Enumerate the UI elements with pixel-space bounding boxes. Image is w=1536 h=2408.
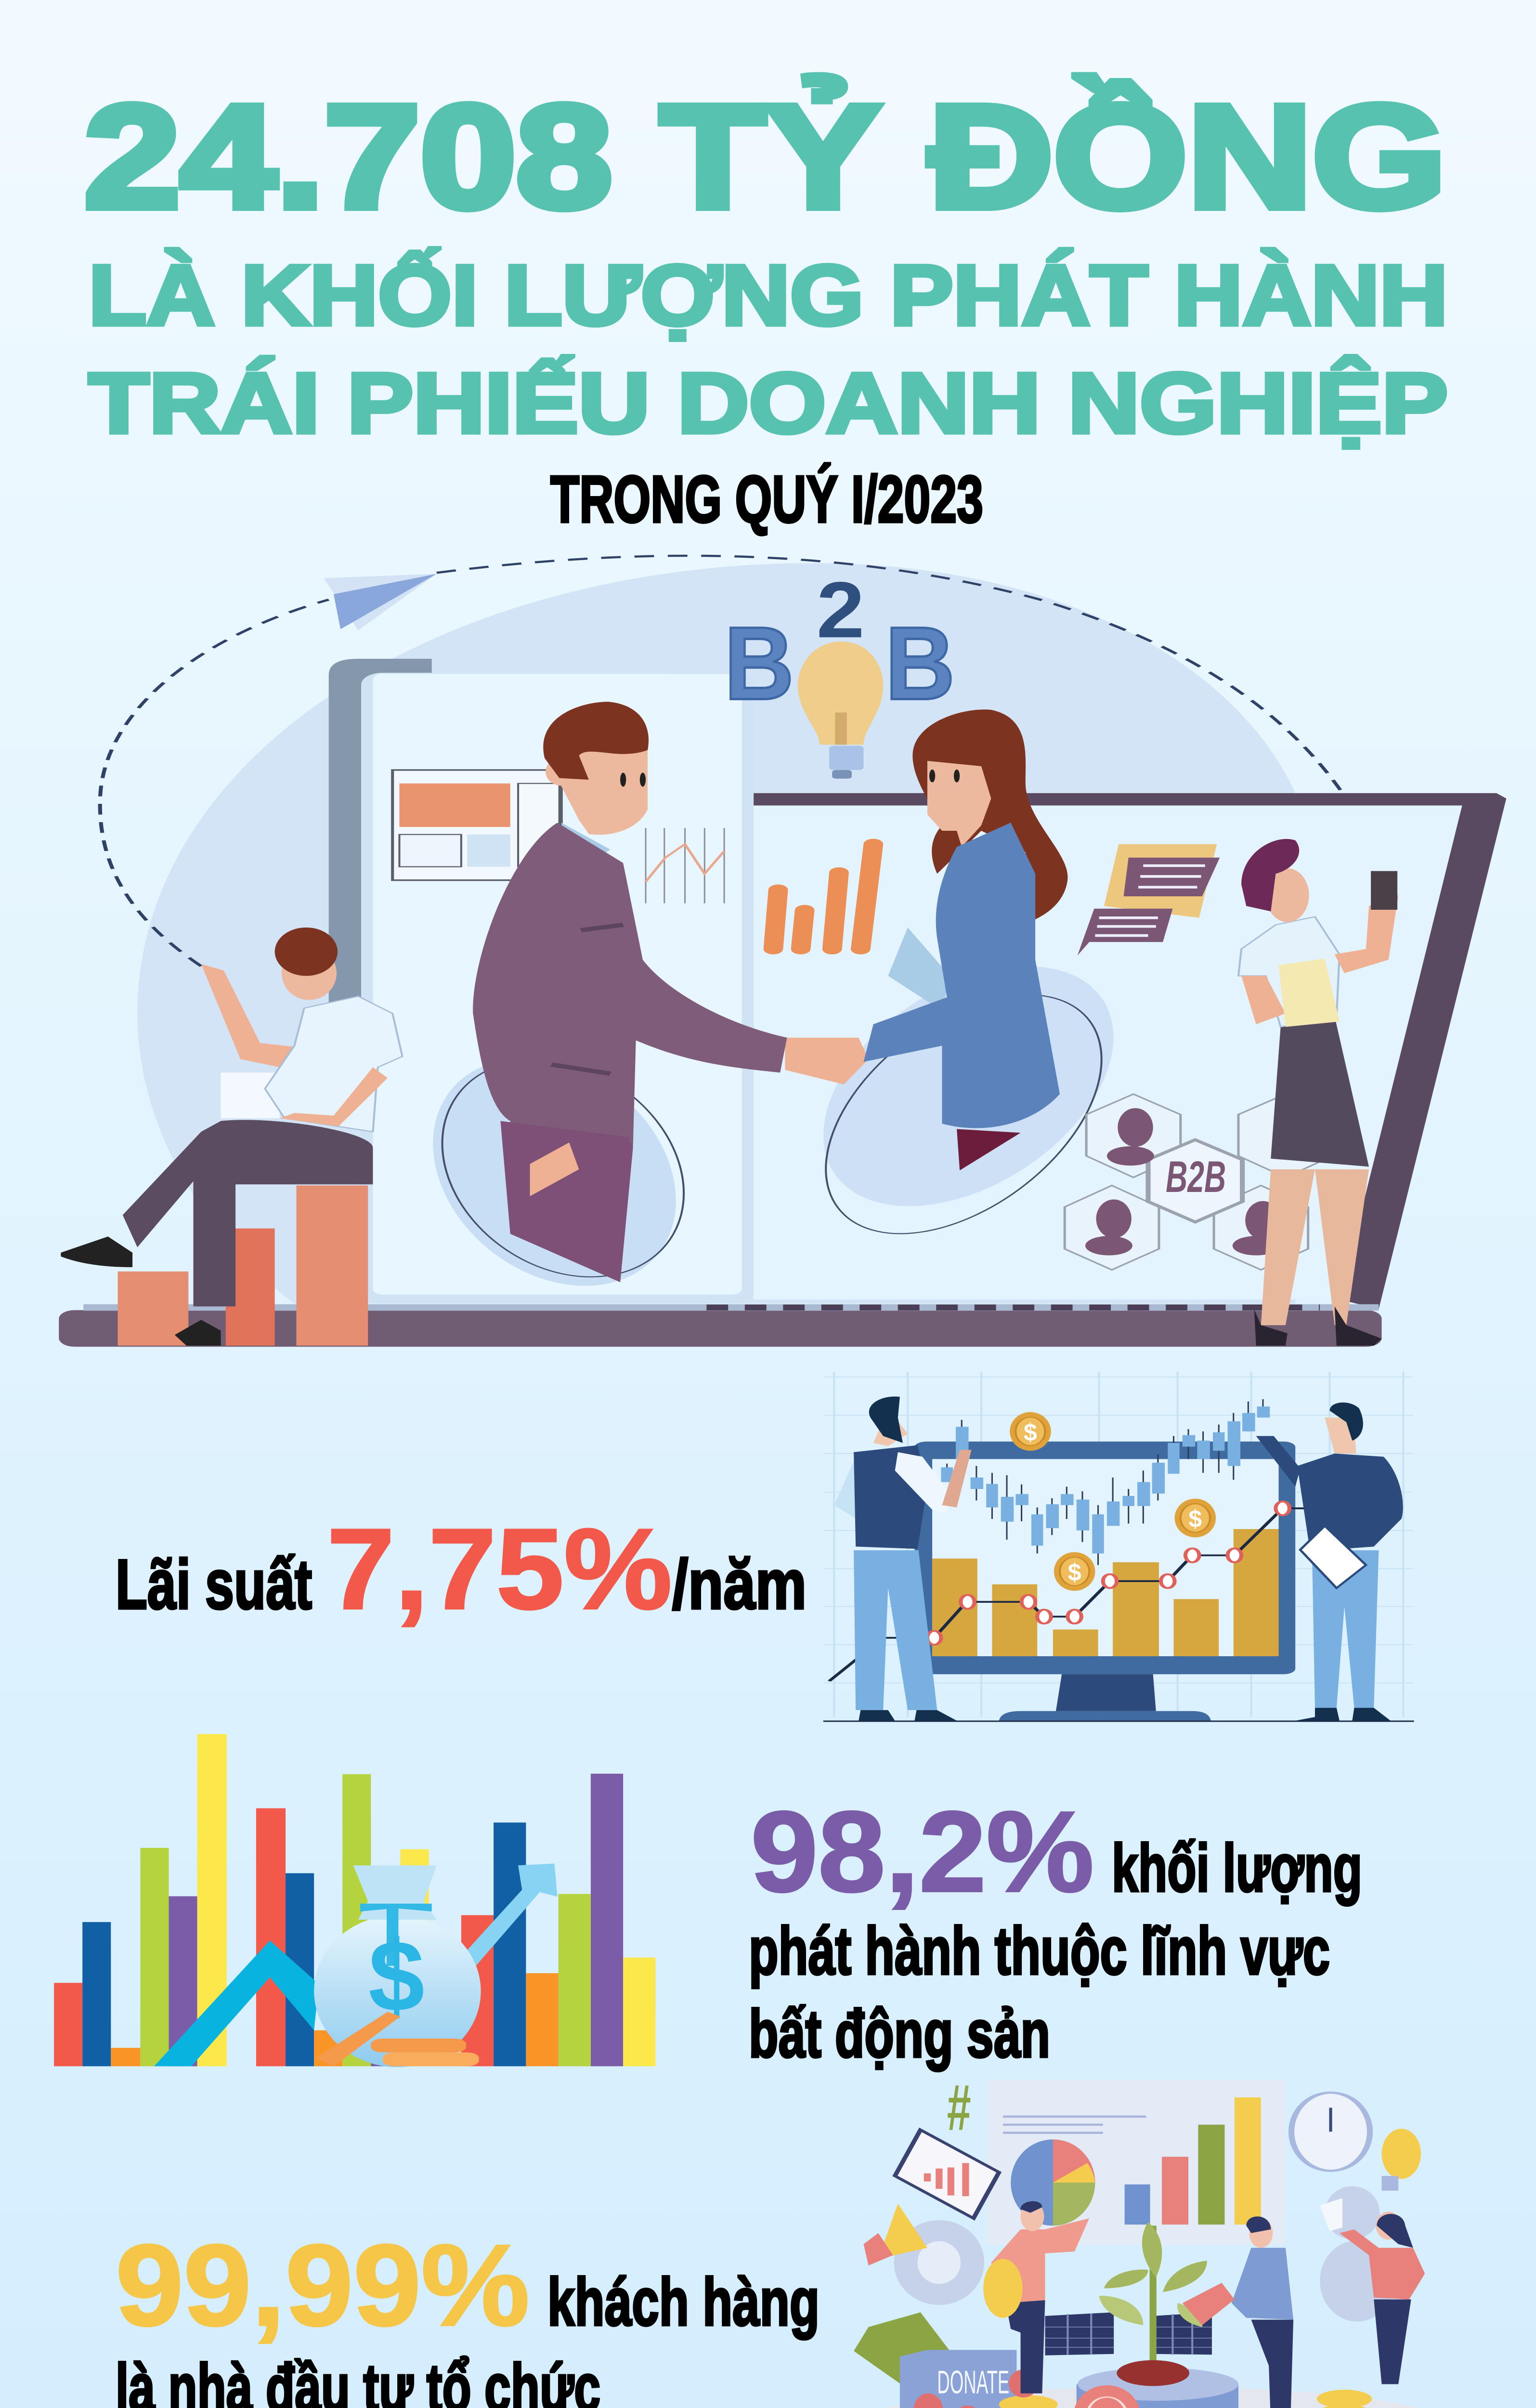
banknote [854, 2312, 950, 2384]
text line 1: khách hàng [547, 2264, 820, 2340]
ground [854, 2387, 1452, 2408]
title line 3: TRÁI PHIẾU DOANH NGHIỆP [89, 355, 1448, 451]
B2B letters: B [724, 605, 794, 721]
hash icon: # [947, 2071, 971, 2144]
label: Lãi suất [116, 1545, 312, 1623]
bulb [1382, 2129, 1421, 2191]
title block [84, 74, 1448, 537]
stat: real estate share [749, 1788, 1362, 2071]
value: 7,75% [327, 1505, 672, 1633]
tablet [895, 2130, 999, 2218]
cylinder plinth [1077, 2368, 1238, 2408]
left tablet [329, 659, 754, 1304]
illustration: growth team [854, 2071, 1452, 2408]
coloured bars [54, 1734, 655, 2066]
money bag: $ [368, 1920, 425, 2033]
subtitle: TRONG QUÝ I/2023 [550, 462, 983, 537]
title line 2: LÀ KHỐI LƯỢNG PHÁT HÀNH [89, 248, 1448, 343]
title line 1: 24.708 TỶ ĐỒNG [84, 74, 1446, 238]
solar panels [1045, 2312, 1212, 2356]
plant [1099, 2222, 1207, 2386]
light bulb [798, 641, 883, 779]
rising arrow [154, 1863, 558, 2066]
seated man with boxes [61, 928, 403, 1346]
donate box [900, 2350, 1016, 2408]
woman with paper [1320, 2198, 1425, 2384]
report board [986, 2080, 1286, 2245]
coins: $ [1024, 1419, 1037, 1446]
orange bars on screen [773, 844, 873, 949]
text line 3: bất động sản [749, 1996, 1050, 2071]
monitor [823, 1441, 1414, 1721]
coins: $ [1068, 1559, 1081, 1586]
value: 98,2% [751, 1788, 1094, 1916]
backdrop blob [137, 563, 1295, 1304]
chat bubbles [1078, 844, 1220, 955]
illustration: B2B handshake [59, 556, 1506, 1347]
B2B letters: B [885, 605, 955, 721]
paper plane [324, 574, 437, 630]
stat: interest rate [116, 1505, 807, 1633]
person pointing [983, 2201, 1094, 2394]
line chart [646, 828, 724, 903]
donate box: DONATE [937, 2364, 1009, 2401]
trend line [829, 1473, 1354, 1681]
value: 99,99% [116, 2221, 530, 2350]
portal ellipse: woman [747, 943, 1176, 1255]
text line 1: khối lượng [1112, 1830, 1362, 1906]
left trader [834, 1397, 972, 1721]
portal ellipse: man [397, 1045, 721, 1298]
stat: institutional investors [116, 2221, 820, 2408]
gears [894, 2186, 1394, 2321]
coins: $ [1188, 1505, 1202, 1532]
hexagon network [1065, 1094, 1333, 1270]
bars [932, 1529, 1279, 1656]
bar chart with money bag [54, 1734, 655, 2067]
candlesticks [941, 1399, 1270, 1565]
laptop screen [754, 793, 1506, 1309]
laptop base [59, 1304, 1382, 1347]
B2B letters [724, 565, 955, 721]
right trader [1256, 1402, 1403, 1721]
board bars [1125, 2097, 1261, 2225]
coins [1010, 1412, 1216, 1591]
man in suit [473, 702, 869, 1282]
dashboard card [392, 770, 561, 880]
unit: /năm [672, 1545, 807, 1623]
clock [1291, 2093, 1370, 2171]
standing woman with phone [1238, 839, 1398, 1346]
woman in blue [863, 709, 1067, 1170]
person watering [1183, 2216, 1293, 2408]
hexagon network: B2B [1166, 1152, 1226, 1202]
grid [824, 1372, 1413, 1717]
money bag [314, 1865, 481, 2067]
dashed flight path [100, 556, 1369, 966]
coins and hearts [892, 2369, 1405, 2408]
megaphone [863, 2204, 927, 2265]
B2B letters: 2 [817, 565, 865, 654]
pie chart [1011, 2139, 1095, 2225]
illustration: traders and monitor [823, 1372, 1414, 1721]
text line 2: phát hành thuộc lĩnh vực [749, 1913, 1330, 1989]
coin stack [316, 2012, 479, 2066]
target [1074, 2385, 1140, 2408]
